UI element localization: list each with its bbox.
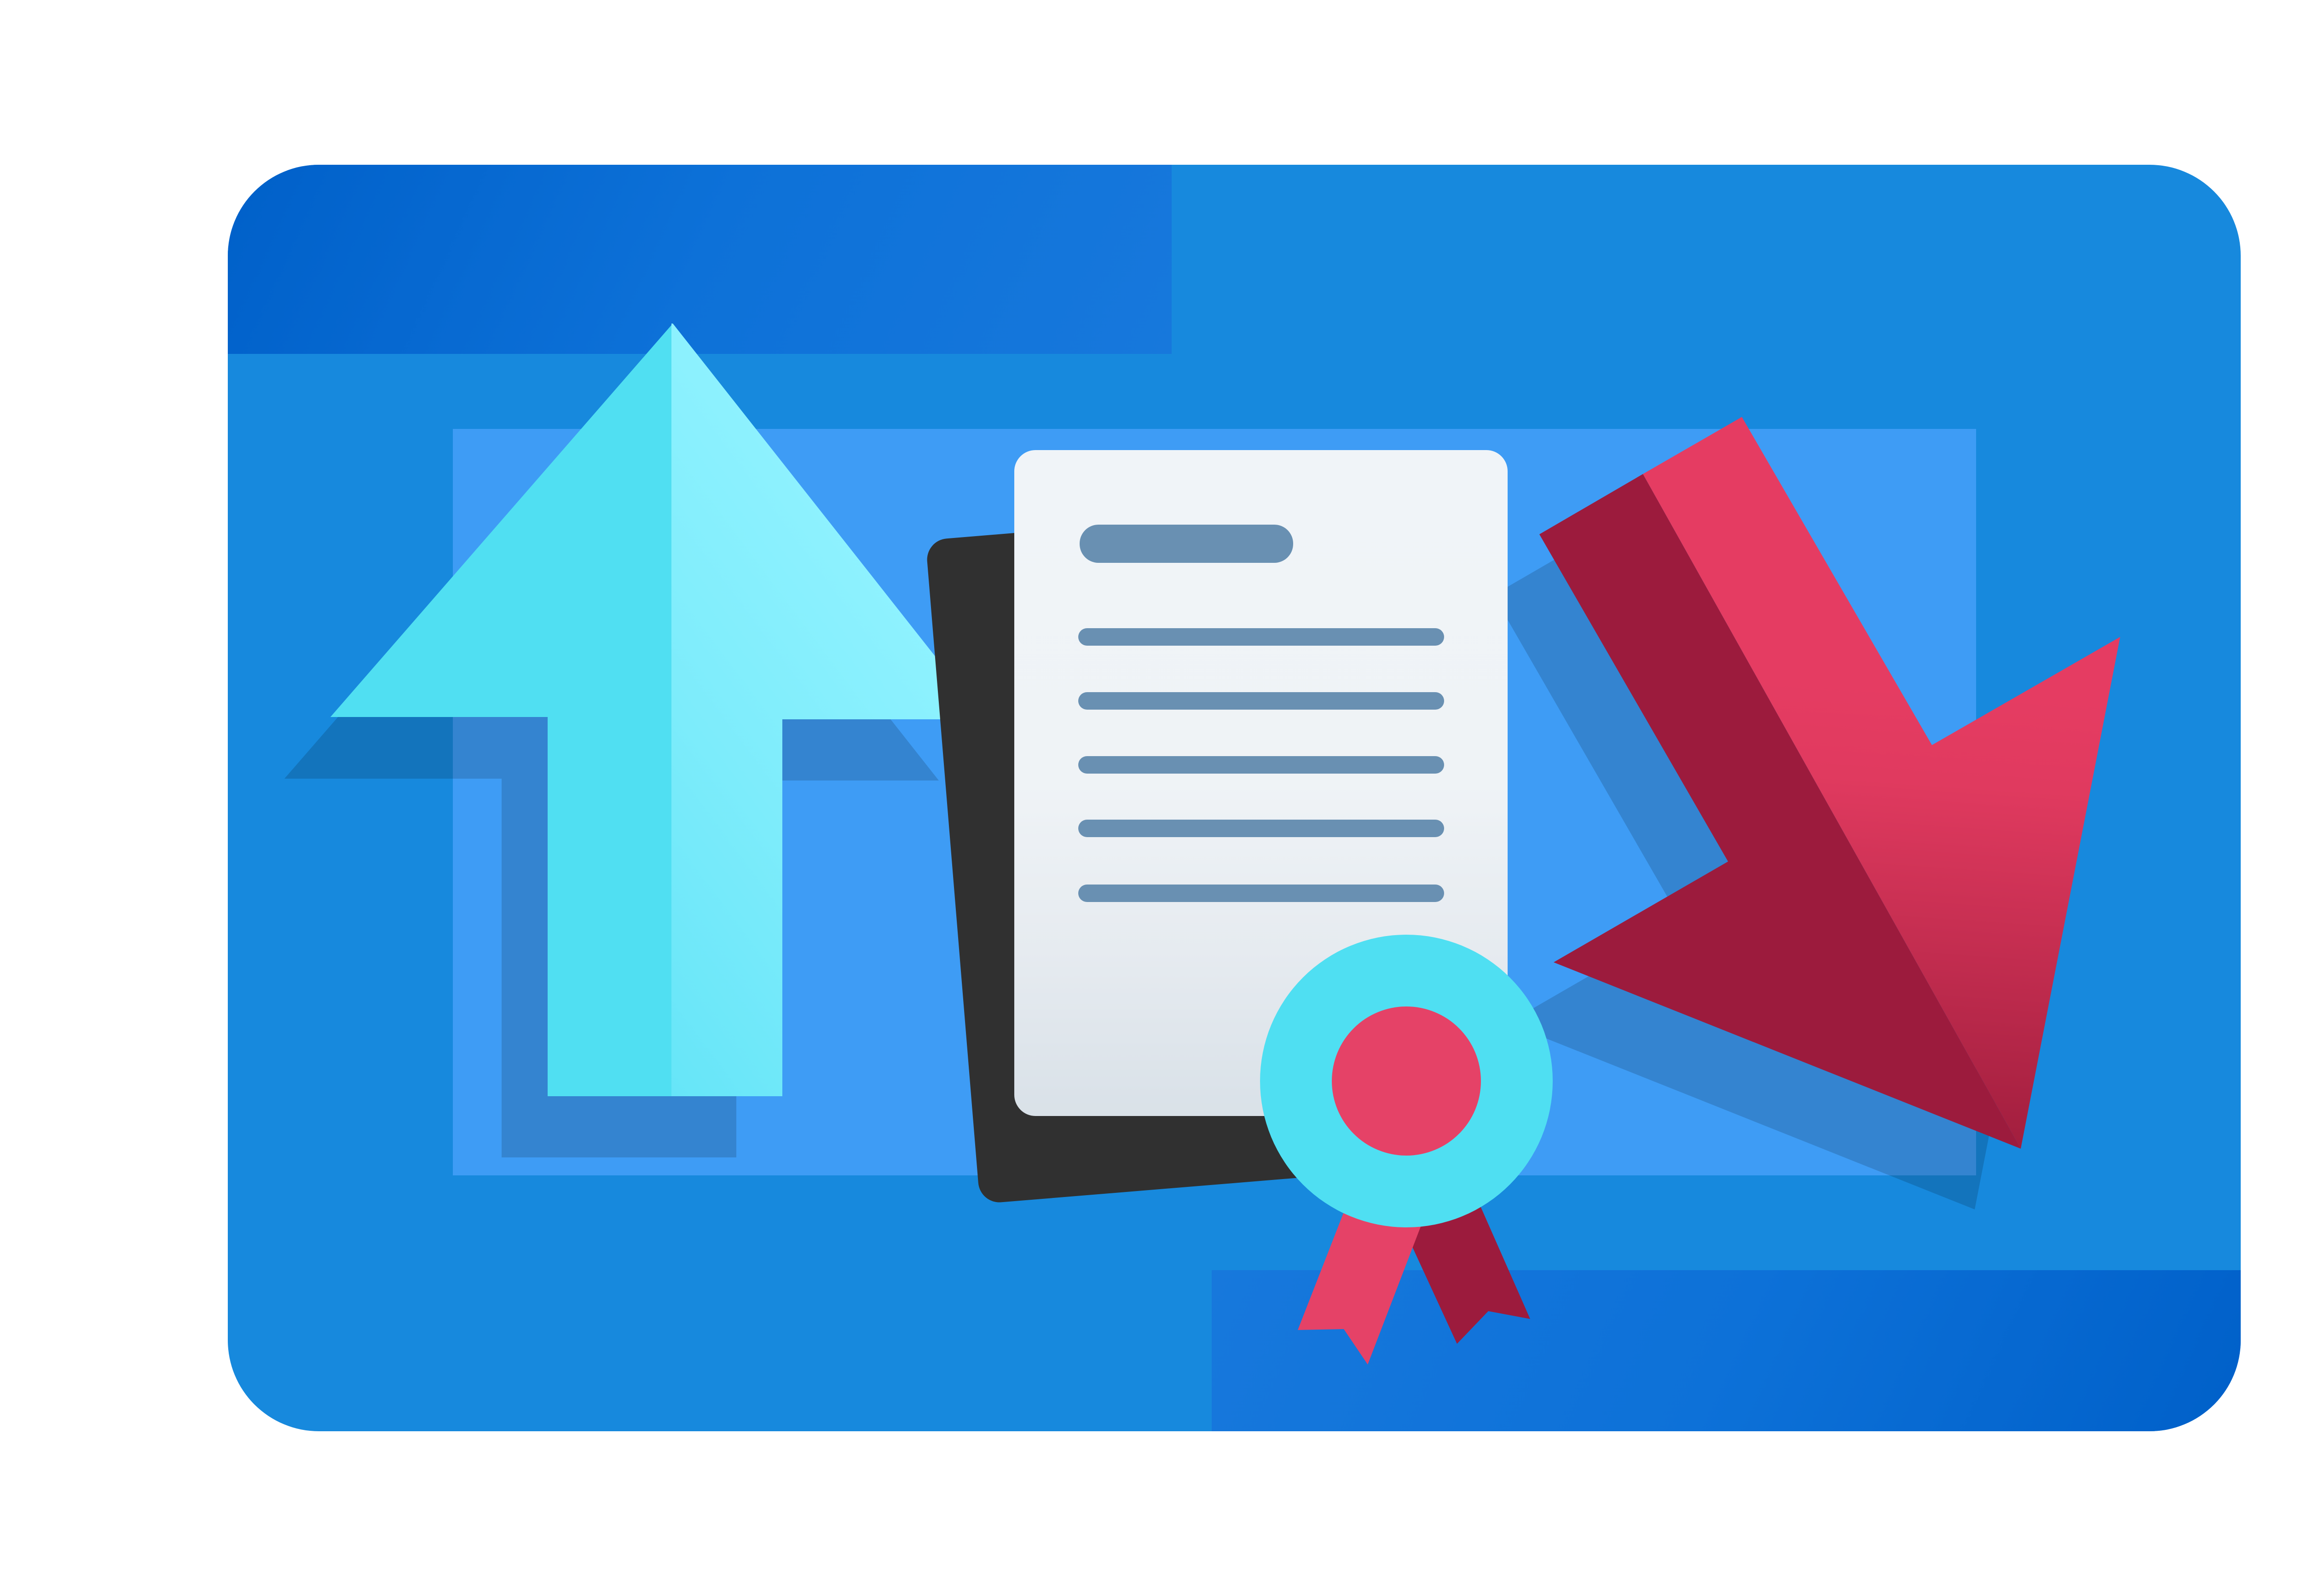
dark ribbon tail <box>1399 1205 1530 1344</box>
panel: blue card <box>228 165 2241 1431</box>
back sheet <box>925 503 1439 1204</box>
down arrow: dark half <box>1539 474 2021 1149</box>
panel: bottom-right band <box>1212 1270 2241 1431</box>
illustration <box>228 165 2241 1431</box>
panel: light blue inner rectangle <box>453 429 1976 1175</box>
up arrow shadow <box>284 385 939 1157</box>
up arrow: light right half <box>671 324 985 1096</box>
certificate <box>925 450 1508 1204</box>
down arrow <box>1539 417 2120 1149</box>
up arrow <box>330 324 985 1096</box>
rosette <box>1260 935 1553 1365</box>
seal centre <box>1332 1006 1481 1156</box>
down arrow shadow <box>1493 478 2074 1209</box>
pink ribbon tail <box>1298 1206 1421 1365</box>
front sheet <box>1014 450 1508 1116</box>
title bar <box>1080 525 1293 563</box>
down arrow: light half <box>1643 417 2120 1149</box>
text lines <box>1078 628 1444 902</box>
panel: top-left band <box>228 165 1172 354</box>
up arrow: darker left half <box>330 324 673 1096</box>
seal ring <box>1260 935 1553 1227</box>
